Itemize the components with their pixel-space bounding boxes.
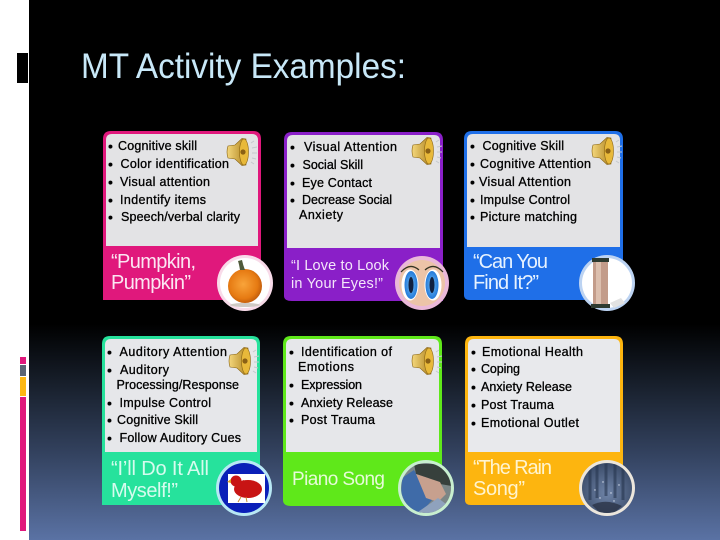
skills list: Identification of xyxy=(301,345,393,359)
skills list: Coping xyxy=(481,362,520,376)
skills list: • xyxy=(107,362,112,378)
skills list: • xyxy=(107,412,112,428)
skills list: • xyxy=(290,175,295,191)
skills list: Auditory Attention xyxy=(120,345,227,359)
skills list: Decrease Social xyxy=(302,193,392,207)
skills list xyxy=(289,344,393,428)
skills list: • xyxy=(471,344,476,360)
skills list: • xyxy=(108,209,113,225)
skills list: • xyxy=(470,156,475,172)
skills list: Visual Attention xyxy=(304,140,397,154)
skills list: Cognitive skill xyxy=(118,139,197,153)
icon: speaker xyxy=(412,138,442,164)
panel: Pumpkin, Pumpkin xyxy=(103,131,273,311)
icon: speaker xyxy=(412,348,442,374)
skills list: Visual Attention xyxy=(479,175,571,189)
skills list: • xyxy=(471,379,476,395)
skills list: • xyxy=(108,156,113,172)
skills list xyxy=(290,139,397,222)
icon: speaker xyxy=(592,138,622,164)
skills list: • xyxy=(108,174,113,190)
activity name xyxy=(473,251,548,294)
activity name xyxy=(291,258,390,292)
skills list: Emotions xyxy=(298,360,354,374)
skills list: Speech/verbal clarity xyxy=(121,210,241,224)
skills list: • xyxy=(471,415,476,431)
skills list: Visual attention xyxy=(120,175,210,189)
panel: I'll Do It All Myself xyxy=(102,336,272,516)
skills list: • xyxy=(290,192,295,208)
skills list xyxy=(470,138,591,225)
activity name: Find It?” xyxy=(473,272,539,294)
skills list: Auditory xyxy=(120,363,170,377)
skills list: Cognitive Skill xyxy=(482,139,564,153)
activity name: “The Rain xyxy=(473,457,552,479)
skills list: • xyxy=(107,395,112,411)
skills list: • xyxy=(107,344,112,360)
skills list: • xyxy=(289,344,294,360)
icon: speaker xyxy=(229,348,259,374)
activity name: Piano Song xyxy=(292,469,385,490)
skills list: • xyxy=(108,138,113,154)
skills list: Post Trauma xyxy=(481,398,554,412)
skills list: Anxiety Release xyxy=(301,396,393,410)
activity name: “Pumpkin, xyxy=(111,251,196,273)
skills list: • xyxy=(470,138,475,154)
skills list: Cognitive Skill xyxy=(117,413,198,427)
skills list xyxy=(107,344,241,446)
skills list: Cognitive Attention xyxy=(480,157,591,171)
left white margin strip xyxy=(0,0,29,540)
skills list: • xyxy=(471,361,476,377)
skills list: • xyxy=(289,377,294,393)
skills list: Anxiety xyxy=(299,208,344,222)
skills list: Anxiety Release xyxy=(481,380,572,394)
icon: eyes xyxy=(395,256,449,310)
skills list: • xyxy=(108,192,113,208)
icon: red bird xyxy=(216,460,272,516)
skills list: Eye Contact xyxy=(302,176,373,190)
skills list: Impulse Control xyxy=(480,193,570,207)
activity name: Song” xyxy=(473,478,525,500)
activity name xyxy=(111,251,196,294)
activity name: “I Love to Look xyxy=(291,258,390,274)
title: MT Activity Examples: xyxy=(81,47,406,86)
skills list: Processing/Response xyxy=(116,378,239,392)
activity name xyxy=(111,458,209,502)
skills list: Social Skill xyxy=(302,158,363,172)
icon: rain scene xyxy=(579,460,635,516)
skills list: Follow Auditory Cues xyxy=(120,431,241,445)
skills list: • xyxy=(290,157,295,173)
skills list: • xyxy=(289,395,294,411)
skills list: • xyxy=(290,139,295,155)
skills list: • xyxy=(471,397,476,413)
skills list: Picture matching xyxy=(480,210,577,224)
skills list xyxy=(108,138,241,225)
activity name xyxy=(473,457,552,500)
activity name: Pumpkin” xyxy=(111,272,191,294)
panel: The Rain Song xyxy=(465,336,635,516)
skills list xyxy=(471,344,583,431)
activity name: in Your Eyes!” xyxy=(291,276,383,292)
panel: Piano Song xyxy=(283,336,454,516)
skills list: Emotional Health xyxy=(482,345,583,359)
skills list: Expression xyxy=(301,378,362,392)
skills list: • xyxy=(470,209,475,225)
icon: speaker xyxy=(227,138,257,166)
activity name: Myself!” xyxy=(111,480,178,502)
panel: Can You Find It xyxy=(464,131,635,311)
panel: I Love to Look in Your Eyes xyxy=(284,132,449,310)
skills list: Color identification xyxy=(120,157,229,171)
skills list: Post Trauma xyxy=(301,413,375,427)
skills list: • xyxy=(289,412,294,428)
activity name: “I’ll Do It All xyxy=(111,458,209,480)
skills list: Impulse Control xyxy=(120,396,211,410)
skills list: Emotional Outlet xyxy=(481,416,580,430)
skills list: • xyxy=(470,192,475,208)
icon: pumpkin xyxy=(217,255,273,311)
icon: person holding head xyxy=(398,460,454,516)
skills list: • xyxy=(107,430,112,446)
skills list: Indentify items xyxy=(120,193,206,207)
skills list: • xyxy=(470,174,475,190)
icon: search tube xyxy=(579,255,635,311)
activity name: “Can You xyxy=(473,251,548,273)
